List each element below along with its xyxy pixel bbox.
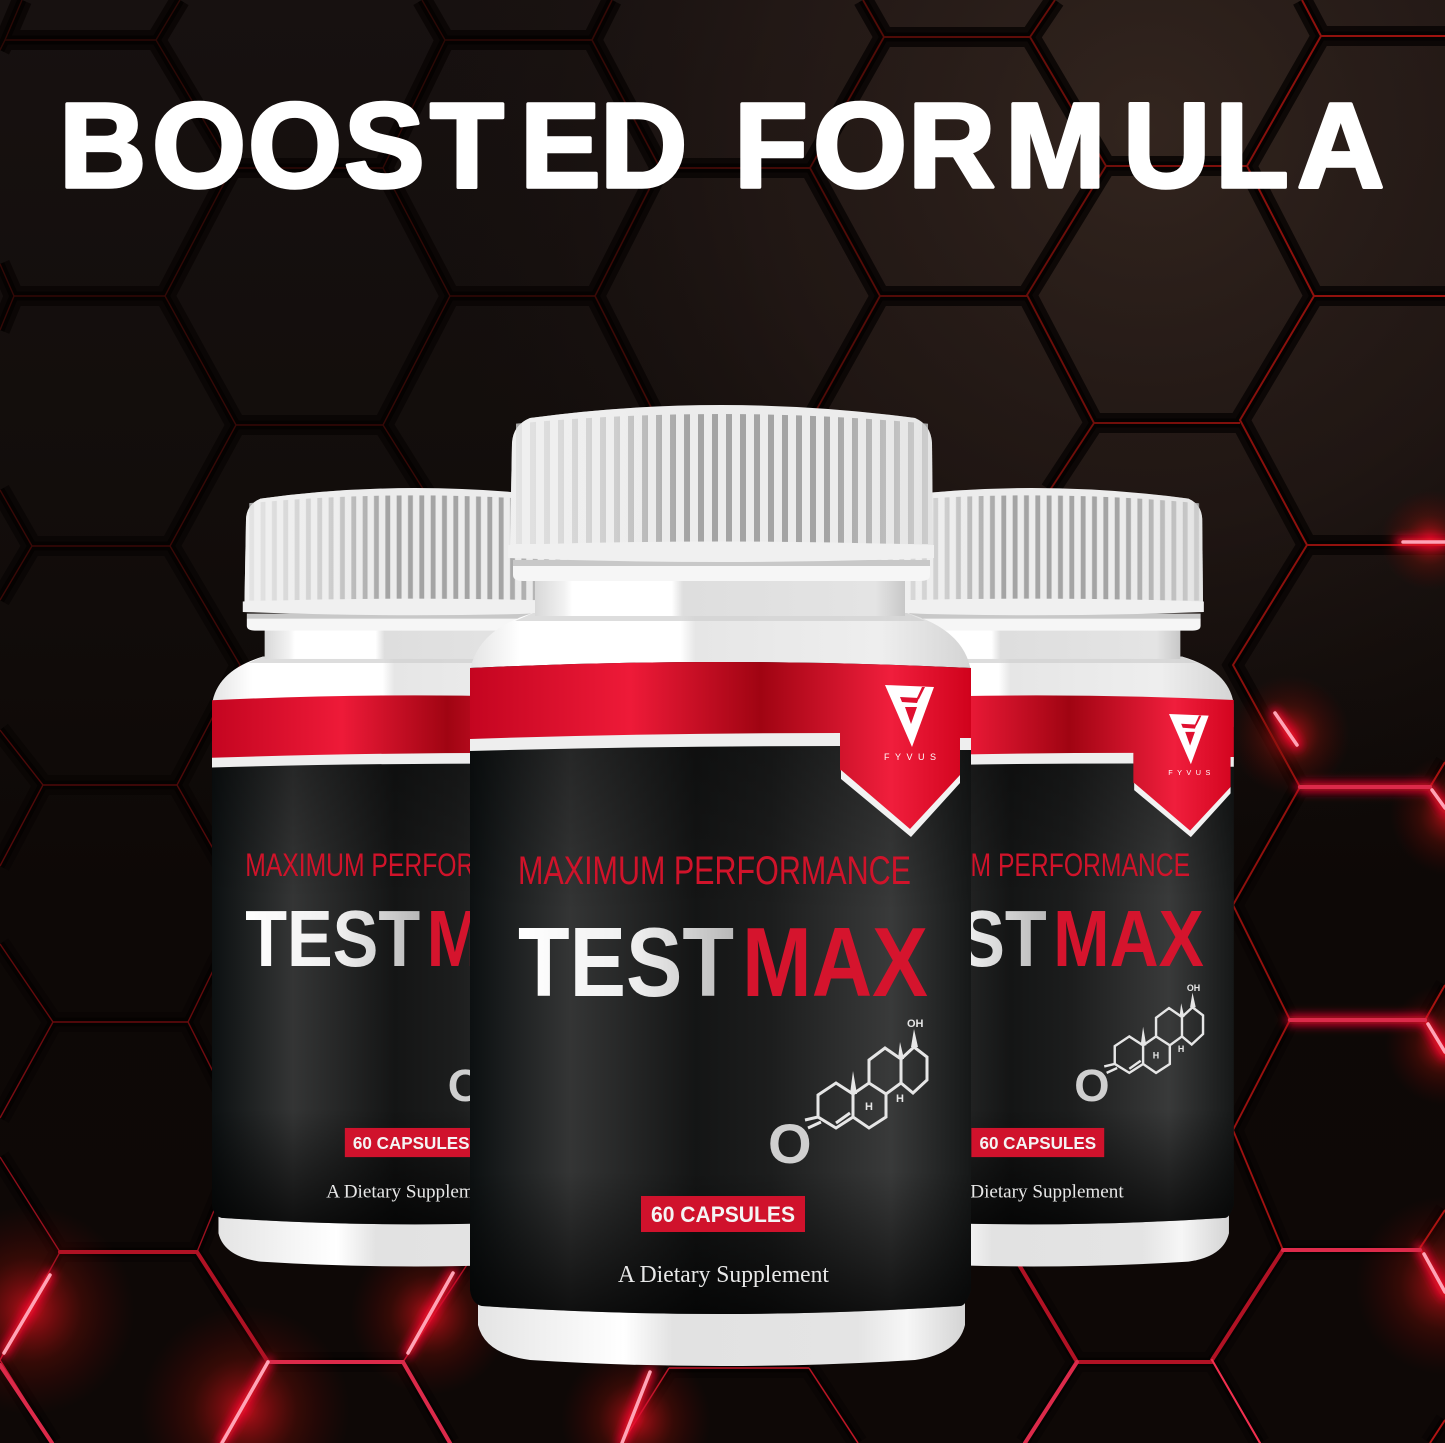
right bottle molecule: H — [1178, 1044, 1184, 1054]
center bottle product name — [518, 907, 928, 1017]
center bottle logo — [884, 685, 936, 762]
right bottle label text: TEST — [872, 894, 1047, 983]
center bottle molecule: O — [768, 1112, 812, 1175]
right bottle molecule: OH — [1187, 983, 1200, 993]
center bottle logo: FYVUS — [884, 752, 936, 762]
center bottle product name: MAX — [742, 907, 928, 1017]
right bottle logo — [1168, 714, 1210, 777]
right bottle molecule: H — [1153, 1050, 1159, 1060]
center bottle molecule: H — [865, 1101, 873, 1113]
right bottle label text: MAX — [1053, 894, 1204, 983]
title: BOOSTED FORMULA — [59, 77, 1384, 213]
left bottle label text — [245, 847, 577, 1203]
right bottle label text: 60 CAPSULES — [979, 1133, 1096, 1153]
left bottle label text: 60 CAPSULES — [353, 1133, 470, 1153]
left bottle label text: O — [448, 1060, 483, 1111]
left bottle label text: A Dietary Supplement — [326, 1182, 498, 1203]
center bottle tagline: MAXIMUM PERFORMANCE — [518, 849, 911, 893]
left bottle label text: MAX — [427, 894, 577, 983]
center bottle footer text: A Dietary Supplement — [618, 1262, 829, 1288]
center bottle capsule badge: 60 CAPSULES — [651, 1202, 795, 1227]
right bottle logo: FYVUS — [1168, 768, 1210, 777]
left bottle label text: TEST — [245, 894, 420, 983]
right bottle molecule: O — [1074, 1060, 1110, 1111]
center bottle molecule — [768, 1018, 927, 1175]
center bottle molecule: H — [896, 1093, 904, 1105]
left bottle label text: MAXIMUM PERFORMANCE — [245, 847, 564, 883]
bottle: center — [470, 405, 971, 1366]
center bottle capsule badge — [641, 1196, 805, 1232]
bottle: left — [212, 488, 618, 1266]
right bottle molecule — [1074, 983, 1203, 1111]
right bottle label text: MAXIMUM PERFORMANCE — [872, 847, 1190, 883]
glowing red hexagon edges — [0, 542, 1445, 1443]
center bottle product name: TEST — [518, 907, 734, 1017]
center bottle molecule: OH — [907, 1018, 924, 1030]
bottle: right — [870, 488, 1234, 1266]
right bottle label text: A Dietary Supplement — [953, 1182, 1124, 1203]
right bottle label text — [872, 847, 1204, 1203]
